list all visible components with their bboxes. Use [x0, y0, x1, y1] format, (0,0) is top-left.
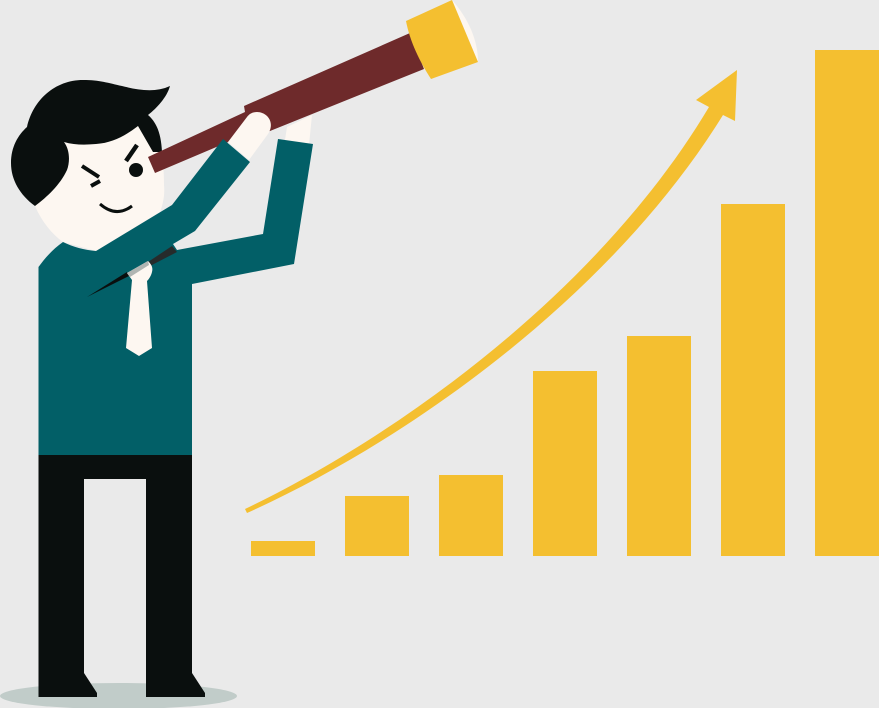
tie: [126, 261, 152, 356]
front hand: [228, 112, 271, 160]
tie blade: [126, 261, 152, 356]
rear hand: [285, 115, 312, 145]
torso and arms: [38, 139, 313, 455]
shirt tear: [87, 246, 177, 297]
telescope tube: [148, 33, 424, 173]
bar chart: [251, 50, 879, 556]
telescope cap: [406, 0, 478, 79]
face: winking eye: [82, 166, 100, 186]
telescope: [148, 0, 478, 173]
hair: [11, 80, 170, 206]
legs: [38, 450, 205, 697]
telescope lens: [452, 0, 478, 62]
face: smile: [100, 204, 132, 212]
ground shadow: [0, 683, 237, 708]
face: brow: [126, 145, 137, 161]
head: [35, 120, 164, 251]
arrow: growth curve: [245, 70, 737, 513]
tie knot shade: [127, 261, 149, 277]
face: eye: [129, 163, 143, 177]
man figure: [11, 0, 478, 697]
